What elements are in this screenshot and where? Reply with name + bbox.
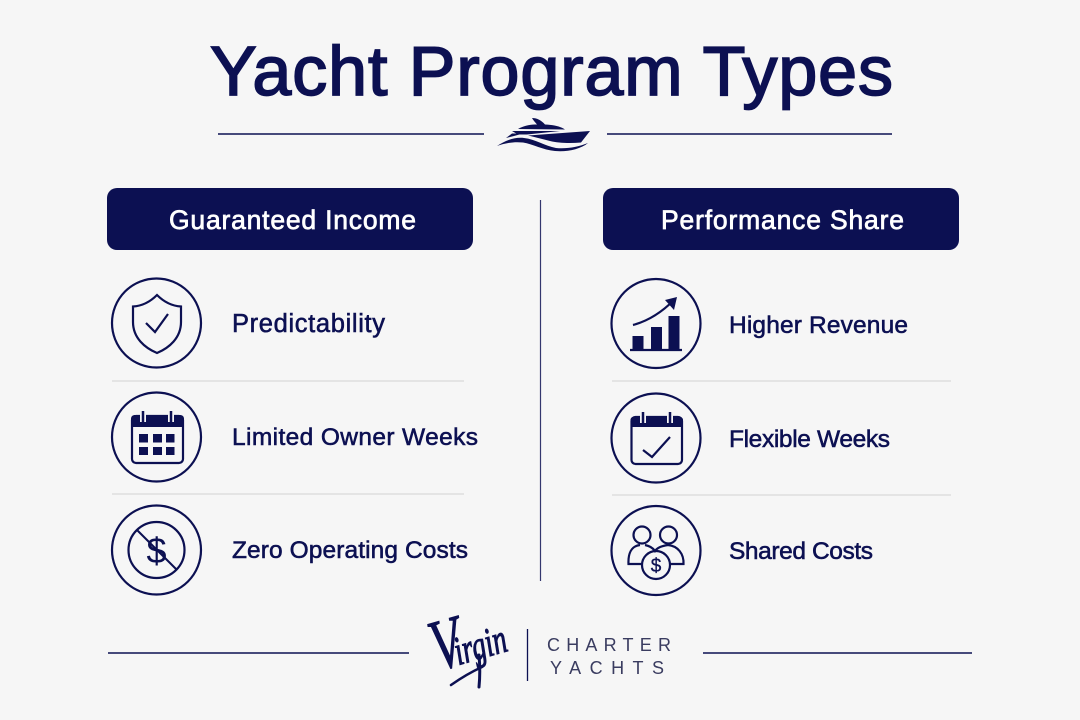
label: predictability: Predictability (232, 310, 385, 338)
icon: yacht (497, 118, 590, 151)
label: zero operating costs: Zero Operating Costs (232, 537, 468, 564)
logo text: charter: CHARTER (547, 635, 671, 655)
row: shared costs (612, 506, 873, 595)
title rule: left (218, 133, 484, 135)
row: higher revenue (612, 279, 908, 368)
icon: growth chart (612, 279, 700, 368)
title rule: right (607, 133, 892, 135)
heading: guaranteed income: Guaranteed Income (169, 205, 416, 235)
logo text: yachts: YACHTS (550, 658, 664, 678)
heading: performance share: Performance Share (661, 205, 904, 235)
row: zero operating costs (112, 506, 468, 594)
icon: people with coin: $ (651, 556, 662, 577)
icon: calendar grid (112, 392, 201, 482)
heading: performance share (603, 188, 959, 250)
icon: no dollar (112, 506, 201, 594)
label: limited owner weeks: Limited Owner Weeks (232, 424, 478, 451)
panel: performance share (603, 188, 959, 595)
icon: no dollar: $ (146, 530, 167, 571)
icon: calendar check (612, 394, 700, 482)
label: flexible weeks: Flexible Weeks (729, 426, 890, 453)
icon: people with coin (612, 506, 700, 595)
title: Yacht Program Types (210, 32, 893, 110)
label: shared costs: Shared Costs (729, 538, 873, 565)
center divider (540, 200, 542, 581)
row: limited owner weeks (112, 392, 478, 482)
logo: Virgin Charter Yachts (421, 590, 671, 687)
row: flexible weeks (612, 394, 890, 482)
footer rule: left (108, 652, 409, 654)
row: predictability (112, 278, 385, 368)
logo wordmark: Virgin: Virgin (421, 590, 514, 687)
panel: guaranteed income (107, 188, 478, 594)
heading: guaranteed income (107, 188, 473, 250)
label: higher revenue: Higher Revenue (729, 312, 908, 339)
icon: shield check (112, 278, 201, 368)
footer rule: right (703, 652, 972, 654)
